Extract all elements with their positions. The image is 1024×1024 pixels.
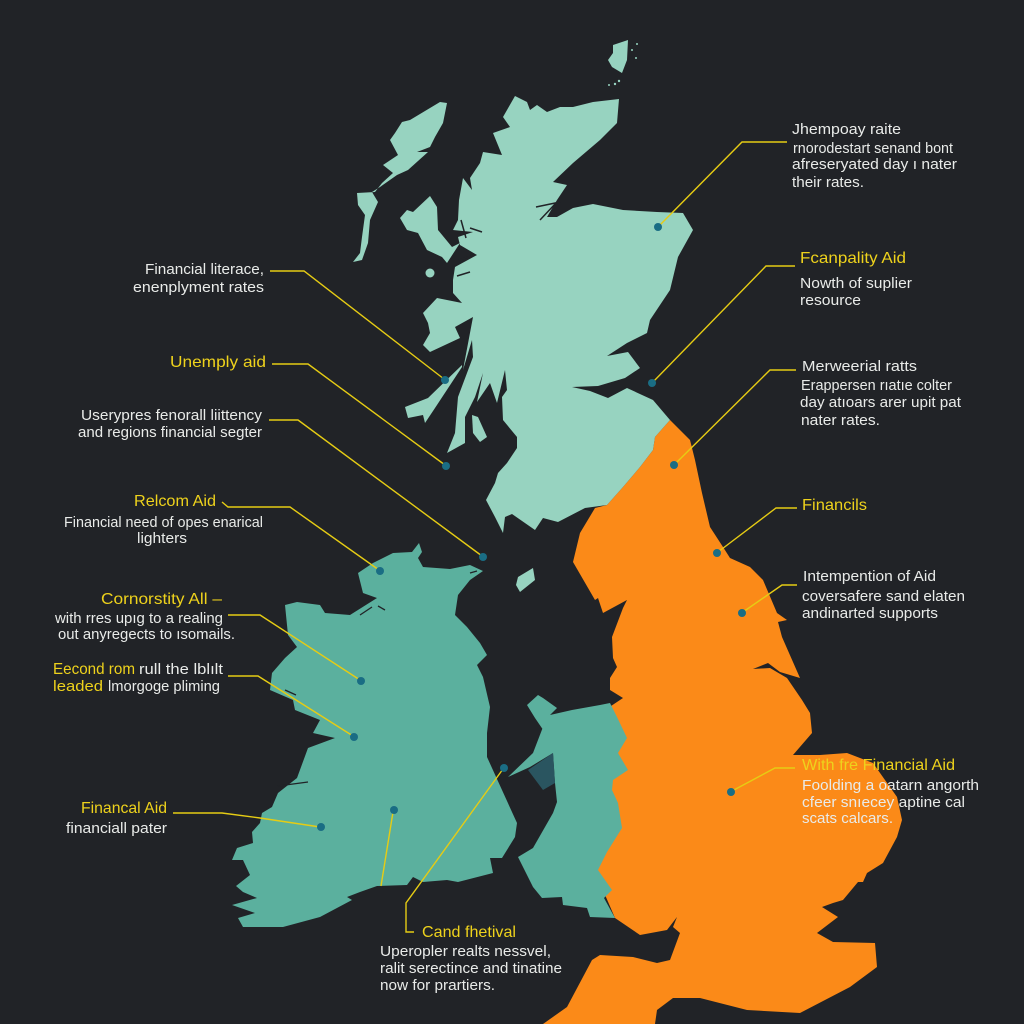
marker	[390, 806, 398, 814]
callout: Merweerial ratts: day atıoars arer upit pat	[800, 394, 962, 411]
callout: Intempention of Aid	[738, 568, 965, 622]
islets: Shetland flecks	[608, 43, 638, 86]
heading: Financal Aid	[81, 800, 167, 817]
marker	[479, 553, 487, 561]
callout text: Jhempoay raite	[792, 121, 901, 138]
marker	[654, 223, 662, 231]
heading continuation: rull the lblılt	[139, 661, 224, 678]
region: Scotland	[353, 40, 693, 592]
leader line	[173, 813, 320, 827]
callout text: with rres upıg to a realing	[54, 610, 223, 627]
leader line	[743, 585, 797, 612]
callout: top right: rnorodestart senand bont	[793, 140, 954, 157]
marker	[713, 549, 721, 557]
heading: Cand fhetival	[422, 924, 516, 941]
marker	[670, 461, 678, 469]
leader line	[406, 769, 503, 932]
callout text: financiall pater	[66, 820, 167, 837]
callout: top right: their rates.	[792, 174, 864, 191]
marker	[357, 677, 365, 685]
marker	[648, 379, 656, 387]
heading: Relcom Aid	[134, 493, 216, 510]
callout text: Financial need of opes enarical	[64, 514, 263, 531]
callout: Cand fhetival: ralit serectince and tinatine	[380, 960, 562, 977]
leader line	[381, 812, 393, 886]
callout: Fcanpality Aid	[648, 250, 912, 387]
callout: Intempention of Aid: coversafere sand elaten	[802, 588, 965, 605]
island: Rum	[426, 268, 434, 278]
leader line	[269, 420, 482, 556]
marker	[727, 788, 735, 796]
leader line	[718, 508, 797, 552]
leader line	[272, 364, 445, 465]
callout text: Financial literace,	[145, 261, 264, 278]
callout: Cand fhetival: now for prartiers.	[380, 977, 495, 994]
callout: With fre Financial Aid: scats calcars.	[802, 810, 893, 827]
callout text: Foolding a oatarn angorth	[802, 777, 979, 794]
island: Skye	[400, 196, 460, 263]
island: Arran	[472, 415, 487, 442]
callout: Merweerial ratts: Erappersen rıatıe colter	[801, 377, 952, 394]
map of regions	[232, 40, 902, 1024]
region: England	[543, 420, 902, 1024]
bay shadow: Cardigan Bay	[528, 753, 555, 790]
callout: Cand fhetival	[380, 764, 562, 994]
marker	[500, 764, 508, 772]
island: Islay	[405, 365, 462, 423]
callout: Intempention of Aid: andinarted supports	[802, 605, 938, 622]
callout: Merweerial ratts: nater rates.	[801, 412, 880, 429]
callout text: Userypres fenorall liittency	[81, 407, 263, 424]
callout: top right: afreseryated day ı nater	[792, 156, 957, 173]
island: Shetland	[608, 40, 628, 73]
callout text: lmorgoge pliming	[108, 678, 220, 695]
heading: Eecond rom	[53, 661, 135, 678]
callout: Relcom Aid	[64, 493, 384, 575]
marker	[317, 823, 325, 831]
heading: Financils	[802, 497, 867, 514]
leader line	[222, 502, 379, 570]
callout text: Intempention of Aid	[803, 568, 936, 585]
region: Wales	[508, 695, 628, 918]
callout: Userypres fenorall	[78, 407, 487, 561]
callout: Cornorstity All	[54, 591, 365, 685]
marker	[350, 733, 358, 741]
callout: south Ireland leader	[381, 806, 398, 886]
heading: Cornorstity All –	[101, 591, 222, 608]
callout: With fre Financial Aid: cfeer snıecey aptine cal	[802, 794, 965, 811]
callout: Financial literace	[133, 261, 449, 384]
heading second line: leaded	[53, 678, 103, 695]
callout: Unemply aid	[170, 354, 450, 470]
callout: With fre Financial Aid	[727, 757, 979, 827]
callout text: Nowth of suplier	[800, 275, 912, 292]
leader line	[653, 266, 795, 382]
callout: Eecond rom	[53, 661, 358, 741]
region: Ireland	[232, 543, 517, 927]
island: Man	[516, 568, 535, 592]
leader line	[228, 676, 353, 736]
marker	[441, 376, 449, 384]
callout: Relcom Aid: lighters	[137, 530, 187, 547]
callout: Fcanpality Aid: resource	[800, 292, 861, 309]
leader line	[732, 768, 795, 791]
marker	[738, 609, 746, 617]
heading: With fre Financial Aid	[802, 757, 955, 774]
heading: Unemply aid	[170, 354, 266, 371]
callout: Financils	[713, 497, 867, 557]
callout: top right	[654, 121, 957, 231]
heading: Fcanpality Aid	[800, 250, 906, 267]
callout: Cornorstity All: out anyregects to ısomails.	[58, 626, 235, 643]
marker	[376, 567, 384, 575]
leader line	[675, 370, 796, 464]
callout: Userypres fenorall: and regions financial segter	[78, 424, 262, 441]
leader line	[270, 271, 444, 379]
inlets: Scottish firths	[457, 202, 560, 276]
callout: Financal Aid	[66, 800, 325, 837]
leader line	[228, 615, 360, 680]
callout text: Merweerial ratts	[802, 358, 917, 375]
island: Lewis and Uist	[353, 102, 447, 262]
callout: Merweerial ratts	[670, 358, 962, 469]
marker	[442, 462, 450, 470]
inlets: Irish lough slits	[278, 571, 477, 786]
callout text: Uperopler realts nessvel,	[380, 943, 551, 960]
callout: Financial literace: enenplyment rates	[133, 279, 264, 296]
leader line	[660, 142, 787, 225]
